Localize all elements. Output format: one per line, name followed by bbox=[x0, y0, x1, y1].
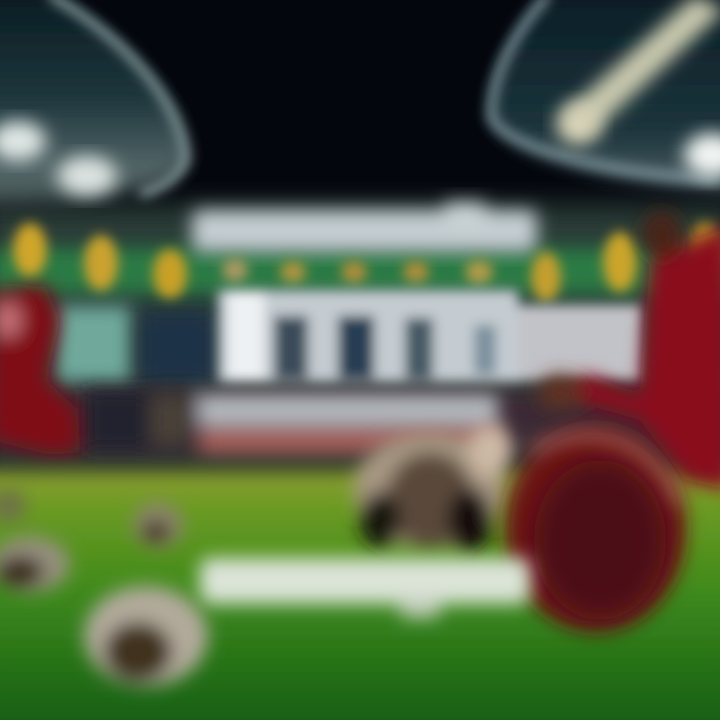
light beam bbox=[565, 0, 720, 135]
green band behind flags bbox=[0, 248, 720, 294]
small ball large front bbox=[84, 586, 208, 686]
small ball far left bbox=[0, 490, 26, 522]
white caption on pitch bbox=[200, 558, 530, 618]
navy panel bbox=[140, 312, 216, 382]
red ball bbox=[505, 426, 685, 630]
beam lamp bbox=[556, 103, 600, 145]
white columns bbox=[218, 290, 643, 382]
stadium light right bbox=[684, 133, 720, 177]
stadium light left 2 bbox=[57, 156, 117, 196]
small ball mid bbox=[133, 502, 183, 548]
grass field bbox=[0, 470, 720, 720]
left glass dome bbox=[0, 0, 187, 205]
yellow flags bbox=[13, 222, 720, 302]
lower white and red band bbox=[85, 390, 500, 454]
small ball left bbox=[0, 536, 70, 592]
brown and white ball bbox=[354, 424, 512, 552]
teal panel bbox=[55, 306, 131, 382]
white banner bbox=[192, 202, 537, 252]
right red player bbox=[538, 211, 720, 490]
left red player bbox=[0, 285, 80, 455]
right glass dome bbox=[490, 0, 720, 190]
night sky bbox=[0, 0, 720, 260]
stadium light left 1 bbox=[0, 121, 46, 161]
stands backdrop bbox=[0, 205, 720, 475]
